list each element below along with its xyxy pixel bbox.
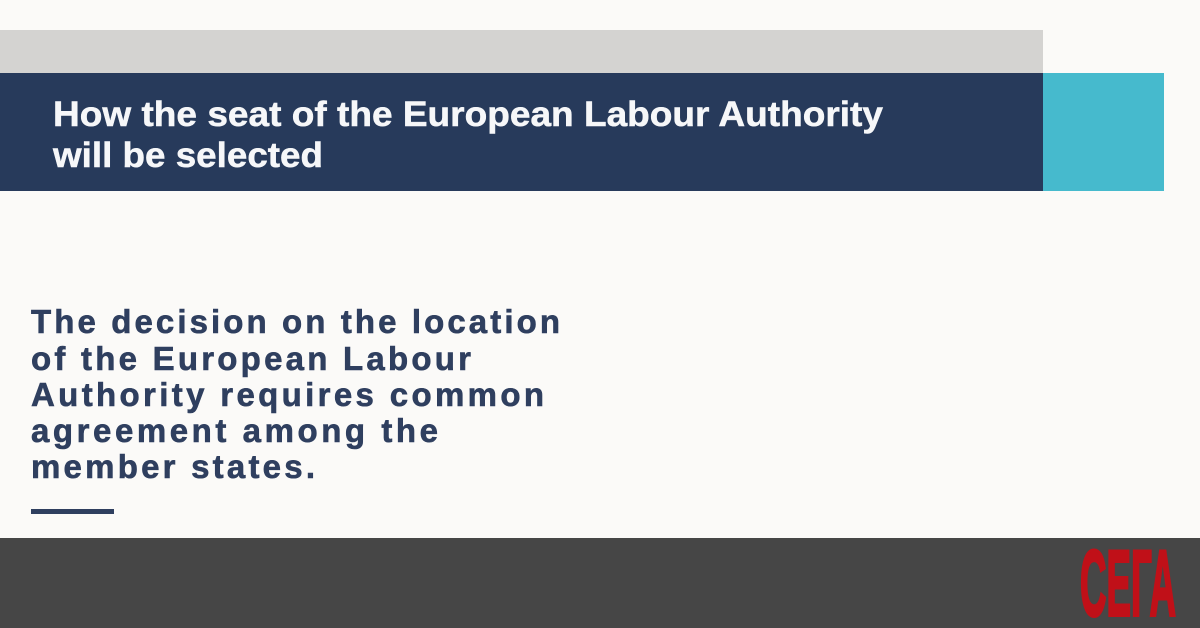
body text: member states.: [31, 448, 315, 485]
header banner: [0, 73, 1043, 191]
teal accent block: [1043, 73, 1164, 191]
short divider under body text: [31, 509, 114, 514]
body text: [31, 303, 560, 485]
footer bar: [0, 530, 1200, 628]
body text: agreement among the: [31, 412, 438, 449]
body text: The decision on the location: [31, 303, 560, 340]
body text: of the European Labour: [31, 340, 471, 377]
title: will be selected: [52, 136, 323, 175]
grey bar behind header: [0, 30, 1043, 73]
title: [52, 95, 884, 175]
title: How the seat of the European Labour Authority: [53, 95, 884, 134]
body text: Authority requires common: [31, 376, 544, 413]
